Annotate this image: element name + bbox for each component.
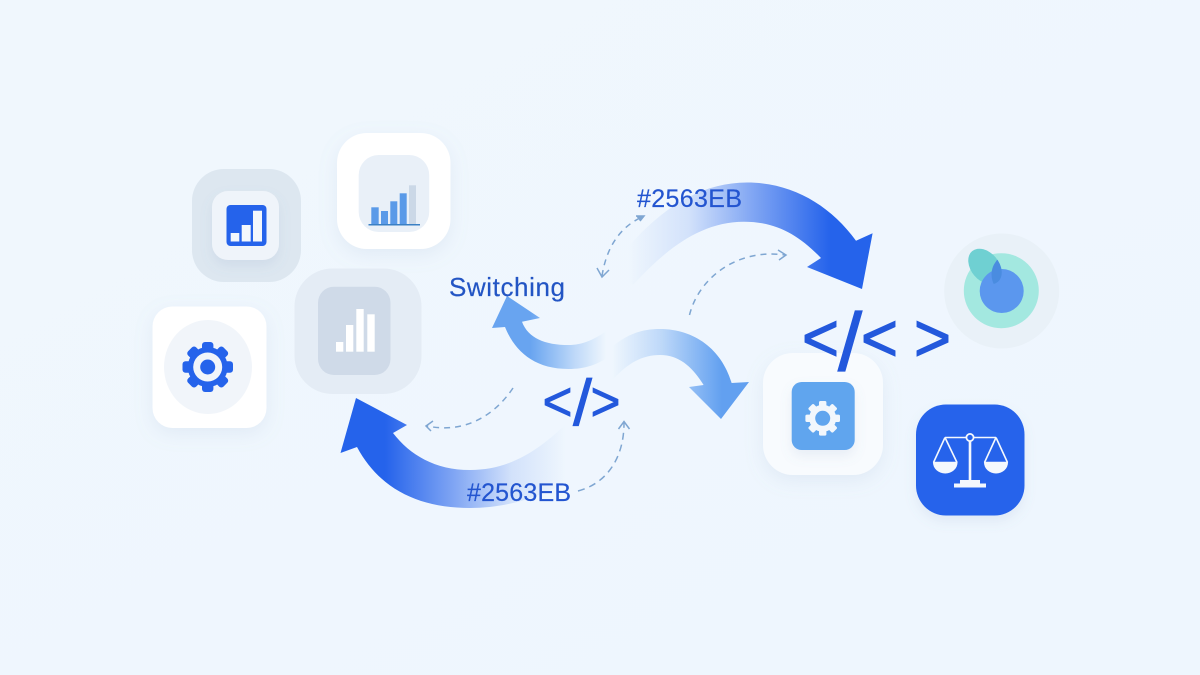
tile: blue bar chart icon on gray bbox=[192, 169, 301, 282]
code symbol: middle: < bbox=[542, 370, 572, 432]
icon: scales bbox=[933, 434, 1008, 488]
label: #2563EB bottom: #2563EB bbox=[467, 479, 571, 507]
arrow: light left bbox=[492, 296, 612, 369]
code symbol: large: / bbox=[838, 297, 862, 388]
dashed arrow: lower left bbox=[426, 388, 513, 431]
code symbol: middle: > bbox=[590, 370, 620, 432]
code symbol: middle: / bbox=[573, 366, 593, 439]
code symbol: large: < bbox=[861, 300, 898, 376]
code symbol: large: < bbox=[802, 300, 839, 376]
tile: white card with light blue gear bbox=[763, 353, 883, 475]
arrow: large bottom left bbox=[340, 398, 585, 508]
code symbol: large bbox=[802, 297, 951, 388]
icon: teal and blue circle bbox=[964, 248, 1039, 328]
dashed arrow: lower bottom bbox=[578, 422, 630, 491]
tile: white card with blue gear bbox=[152, 306, 266, 428]
arrow: light right bbox=[608, 329, 749, 419]
code symbol: middle bbox=[542, 366, 620, 439]
tile: gray card with white bars bbox=[294, 268, 422, 394]
tile: white card with bar chart bbox=[337, 133, 450, 249]
dashed arrow: upper right bbox=[690, 250, 786, 315]
dashed arrow: top double-headed bbox=[597, 216, 644, 277]
tile: blue scales of justice bbox=[916, 404, 1024, 516]
label: #2563EB top: #2563EB bbox=[637, 185, 742, 213]
arrow: large top right bbox=[608, 182, 873, 289]
label: Switching: Switching bbox=[449, 272, 565, 302]
icon: blue gear bbox=[182, 342, 233, 392]
code symbol: large: > bbox=[914, 300, 951, 376]
icon: white gear bbox=[805, 401, 840, 436]
